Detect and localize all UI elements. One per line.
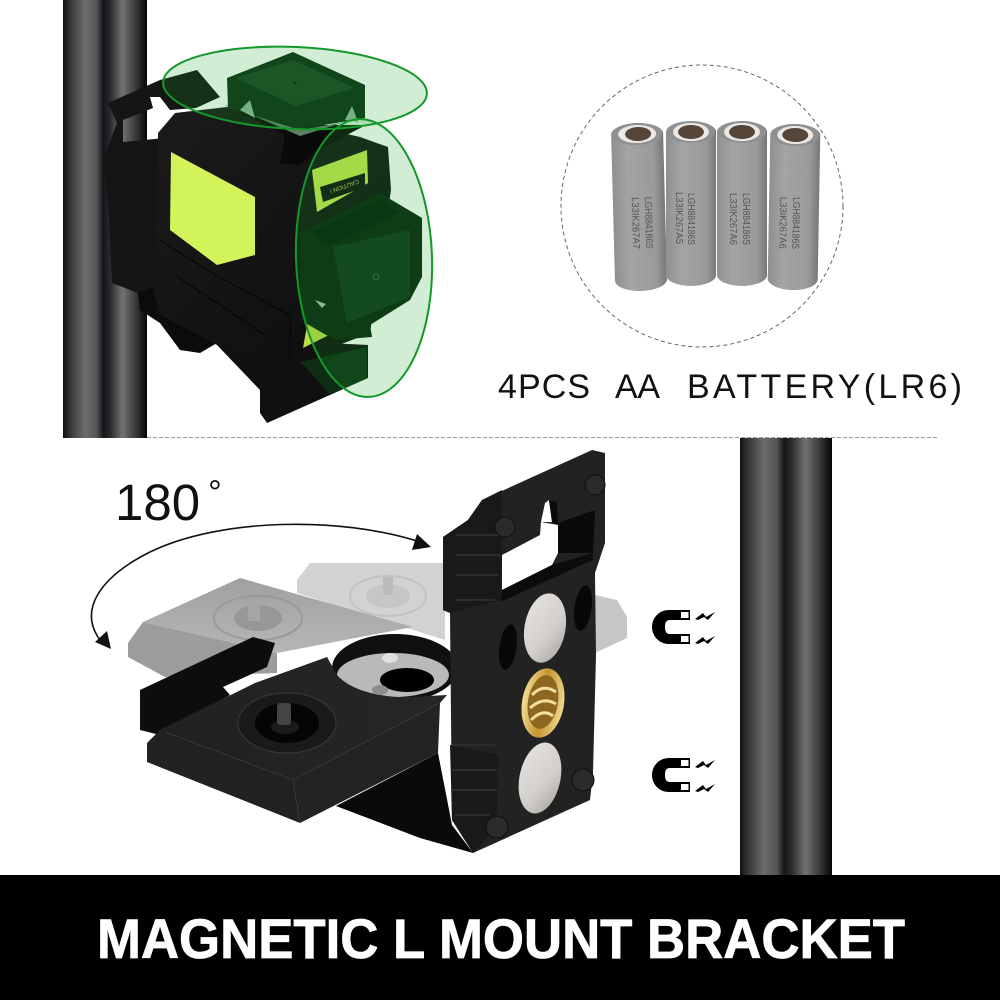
caution label: CAUTION !	[328, 177, 359, 194]
brass threaded insert	[516, 665, 570, 741]
green plate under side cube	[300, 347, 367, 395]
caution label	[320, 173, 365, 202]
battery 1	[611, 122, 667, 292]
upper magnet	[519, 590, 571, 666]
laser level on pole	[103, 41, 437, 423]
rotation angle label: °	[208, 474, 222, 512]
top laser cube	[227, 52, 365, 136]
rotation arrow	[91, 524, 431, 649]
bottom slide plate	[217, 338, 368, 423]
magnet icon upper	[652, 610, 715, 644]
ring around mounting hole	[332, 634, 458, 702]
mounting hole	[380, 668, 434, 692]
pole: bottom right	[740, 438, 832, 875]
plate underside	[336, 753, 473, 853]
title banner	[0, 875, 1000, 1000]
main plate right front	[293, 703, 440, 823]
top slot	[541, 500, 552, 522]
batteries	[611, 121, 820, 292]
L mount bracket	[128, 450, 627, 853]
battery 4	[768, 124, 820, 290]
keyhole slots	[496, 584, 595, 671]
battery 4: LGH884186S	[789, 197, 801, 249]
lower body seam	[160, 240, 290, 360]
battery 1: LGH884186S	[642, 197, 654, 249]
vertical laser plane	[291, 117, 437, 399]
pole: top left	[63, 0, 147, 438]
window frame inner	[558, 510, 595, 553]
plate thumb screw	[238, 693, 336, 753]
bracket upright	[443, 450, 605, 853]
lower magnet	[512, 739, 568, 817]
rotating base	[138, 285, 225, 353]
mounting buttons	[486, 475, 605, 838]
battery 3: L33IK267A6	[727, 193, 738, 245]
mount bracket behind laser	[103, 70, 220, 300]
cube leg neck	[225, 105, 366, 165]
battery 3: LGH884186S	[740, 193, 751, 245]
laser body	[153, 107, 391, 363]
main plate front	[147, 730, 300, 823]
battery caption: AA	[615, 368, 660, 406]
battery 2: L33IK267A5	[673, 192, 684, 244]
side laser cube	[300, 193, 422, 340]
dashed divider	[147, 436, 938, 438]
lower yellow corner	[303, 320, 333, 348]
dashed circle	[561, 65, 843, 347]
main plate top	[160, 657, 447, 780]
left ridges	[452, 535, 500, 815]
rear arm	[140, 637, 275, 735]
horizontal laser plane	[161, 41, 429, 135]
battery 3	[717, 121, 767, 286]
yellow caution strip	[312, 150, 368, 212]
rotation angle label: 180	[115, 474, 200, 531]
title banner: MAGNETIC L MOUNT BRACKET	[97, 907, 905, 970]
yellow side panel	[170, 152, 255, 265]
slot inner shade	[549, 500, 558, 525]
disc screws	[372, 653, 398, 695]
battery caption: BATTERY(LR6)	[687, 368, 962, 406]
magnet icon lower	[652, 758, 715, 792]
battery 1: L33IK267A7	[629, 197, 641, 250]
battery caption: 4PCS	[498, 368, 590, 406]
ghost plate far position	[297, 563, 627, 653]
metal disc	[337, 653, 449, 697]
battery 2	[666, 121, 716, 286]
window lower ledge	[500, 553, 593, 602]
ghost plate near position	[128, 578, 413, 677]
battery 2: LGH884186S	[685, 193, 696, 245]
battery caption	[498, 368, 962, 406]
battery 4: L33IK267A6	[776, 197, 788, 249]
bracket left shaded band	[443, 490, 502, 853]
